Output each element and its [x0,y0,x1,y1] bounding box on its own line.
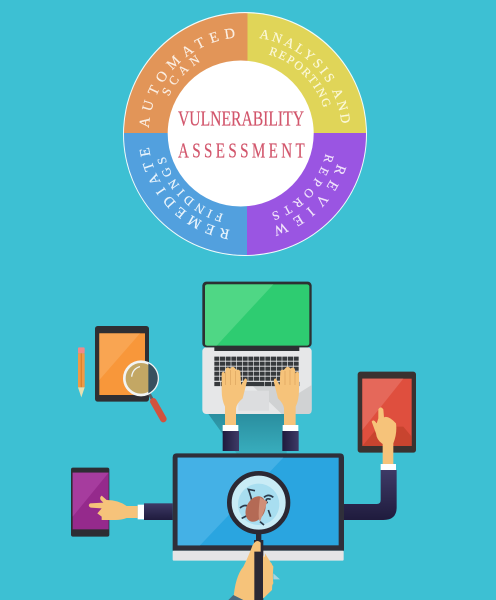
left hand on keyboard [222,367,247,425]
magnifier lens [124,362,158,395]
left sleeve [223,431,239,451]
laptop and hands [202,282,312,453]
sleeve [344,470,397,520]
segment: automated scan [124,13,248,134]
laptop shadow [208,414,287,453]
pencil [78,347,85,397]
center circle [168,60,314,206]
monitor stand strip [173,551,344,561]
title line 1: VULNERABILITY [178,107,304,131]
magnifier with bug [229,473,288,532]
arm [372,407,396,464]
monitor [173,453,344,600]
tablet screen [99,333,145,395]
cuff [138,505,144,519]
segment: review reports [247,133,366,255]
label: reporting: REPORTING [268,46,331,107]
phone body [71,468,109,537]
hand holding magnifier [228,541,280,600]
label: analysis and: ANALYSIS AND [259,30,350,123]
right tablet [358,372,416,453]
magnifier handle [149,393,163,419]
monitor screen [178,458,339,545]
title line 2: ASSESSMENT [178,139,305,162]
label: scan: SCAN [162,54,200,96]
tablet with magnifier and pencil [78,326,163,419]
phone screen [73,473,109,529]
cycle diagram [123,12,367,256]
tablet body [95,326,149,402]
cuff [381,464,396,470]
segment: analysis and reporting [248,13,366,134]
label: remediate: REMEDIATE [140,148,230,240]
laptop base [202,347,312,414]
right hand on keyboard [274,367,299,425]
segment: remediate findings [124,133,247,255]
right arm with hand [344,407,397,520]
monitor frame [173,453,344,551]
label: automated: AUTOMATED [140,28,234,128]
right sleeve [282,431,299,451]
label: findings: FINDINGS [158,157,224,222]
laptop screen [202,282,312,347]
left phone with hand [71,468,173,537]
magnifier handle [251,533,267,540]
bug [240,489,273,525]
keyboard [214,359,299,384]
outer white rim [123,12,367,256]
label: reports: REPORTS [272,154,334,220]
label: review: REVIEW [276,164,346,236]
pointing hand [89,496,138,520]
sleeve [144,503,173,520]
